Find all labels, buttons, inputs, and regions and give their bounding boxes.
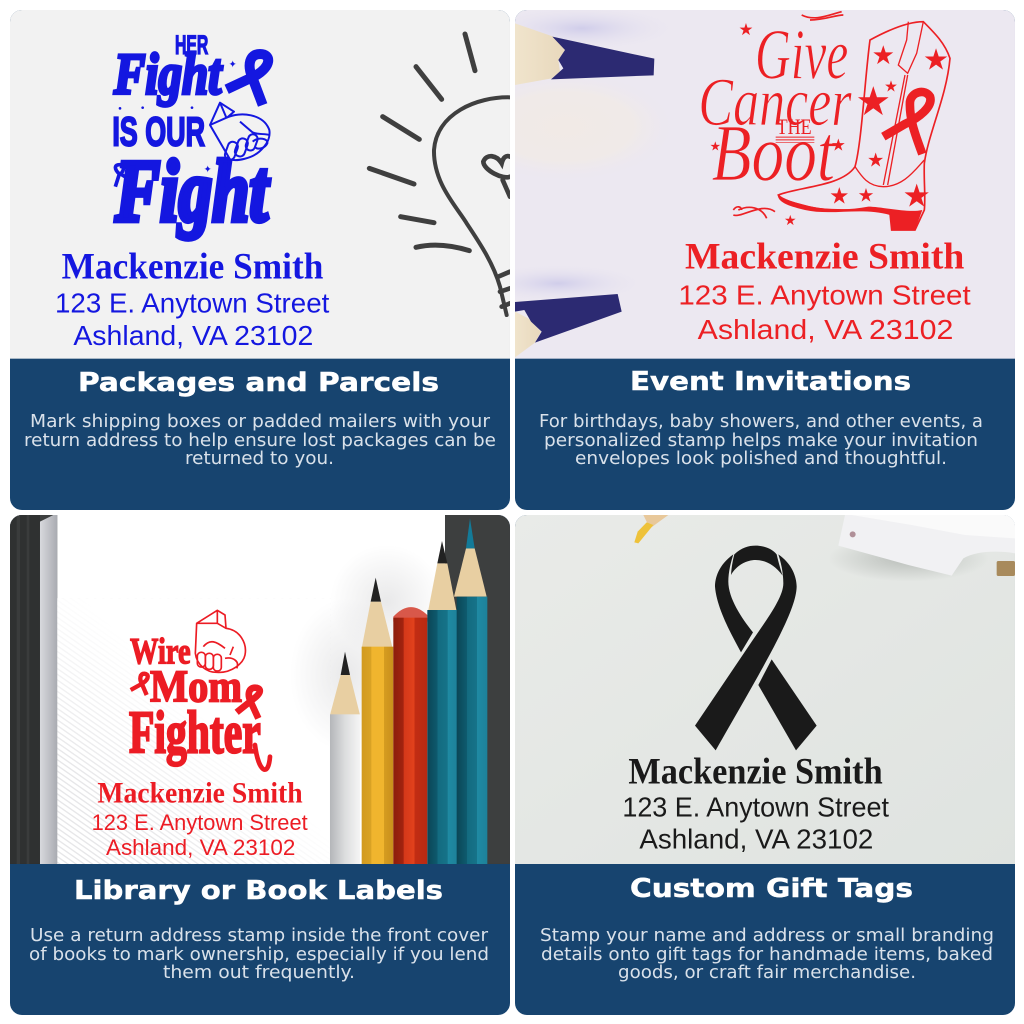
stamp artwork: Her Fight Is Our Fight: HER — [175, 30, 208, 60]
icon: pencil tip bottom — [515, 294, 622, 357]
description: Custom Gift Tags: goods, or craft fair merchandise. — [618, 963, 916, 983]
description: Library or Book Labels: Use a return address stamp inside the front cover — [30, 926, 489, 946]
pencil: yellow — [362, 578, 393, 864]
icon: pencil tip — [634, 515, 668, 543]
pencil: teal one — [427, 541, 458, 864]
description: Library or Book Labels: them out frequently. — [163, 963, 355, 983]
description: Custom Gift Tags: details onto gift tags for handmade items, baked — [541, 945, 993, 965]
stamp address line 2: Ashland, VA 23102 — [639, 823, 873, 854]
stamp name: Mackenzie Smith — [62, 247, 324, 288]
stamp artwork: Give Cancer the Boot: ★ — [784, 213, 797, 229]
book spine — [40, 515, 57, 864]
description: Event Invitations: For birthdays, baby showers, and other events, a — [539, 412, 983, 432]
pencil: silver — [330, 652, 360, 864]
pencils — [330, 518, 487, 864]
book page — [57, 515, 445, 864]
panel: Event Invitations — [515, 10, 1015, 510]
stamp address line 1: 123 E. Anytown Street — [622, 792, 889, 823]
stamp artwork: Give Cancer the Boot: ★ — [923, 42, 949, 76]
stamp artwork: Her Fight Is Our Fight: ✦ — [203, 165, 212, 176]
icon: pencil tip top — [515, 23, 654, 85]
stamp artwork: Give Cancer the Boot: Boot — [712, 110, 836, 198]
swashes — [733, 12, 843, 218]
icon: light bulb sketch — [369, 34, 510, 315]
heading: Library or Book Labels: Library or Book Labels — [74, 876, 443, 906]
stamp artwork: Give Cancer the Boot: ★ — [902, 179, 931, 215]
description: Packages and Parcels: return address to help ensure lost packages can be — [24, 431, 496, 451]
description: Packages and Parcels — [24, 412, 496, 469]
stamp artwork: Give Cancer the Boot: ★ — [884, 78, 898, 96]
stamp artwork: Give Cancer the Boot: ★ — [855, 79, 891, 125]
stamp artwork: Her Fight Is Our Fight: IS OUR — [112, 108, 205, 154]
photo: red stamp on paper with blue pencils — [515, 10, 1015, 359]
heading: Custom Gift Tags: Custom Gift Tags — [630, 874, 913, 904]
stamp name: Mackenzie Smith — [685, 236, 965, 277]
icon: awareness ribbon — [695, 546, 817, 750]
stamp artwork: Her Fight Is Our Fight: Fight — [113, 41, 223, 106]
stamp artwork: Her Fight Is Our Fight: ✦ — [228, 59, 237, 70]
stamp artwork: Give Cancer the Boot — [698, 12, 950, 230]
stamp artwork: Give Cancer the Boot: THE — [777, 114, 812, 139]
stamp address line 1: 123 E. Anytown Street — [678, 279, 971, 310]
description: Event Invitations — [539, 412, 983, 469]
icon: fist outline — [195, 610, 245, 672]
panel: Library or Book Labels — [10, 515, 510, 1015]
stamp artwork: Give Cancer the Boot: ★ — [829, 183, 849, 209]
description: Event Invitations: personalized stamp helps make your invitation — [544, 431, 978, 451]
photo: blue stamp on paper with light bulb sketch — [10, 10, 510, 359]
stamp artwork: Wire Mom Fighter: Fighter — [129, 699, 261, 765]
stamp artwork: Give Cancer the Boot: ★ — [739, 20, 753, 39]
description: Custom Gift Tags — [540, 926, 994, 983]
stamp artwork: Give Cancer the Boot: ★ — [872, 41, 895, 71]
icon: small ribbon — [114, 162, 126, 188]
description: Custom Gift Tags: Stamp your name and address or small branding — [540, 926, 994, 946]
heading: Packages and Parcels: Packages and Parcels — [78, 368, 439, 398]
description: Event Invitations: envelopes look polished and thoughtful. — [575, 449, 947, 469]
stamp artwork: Give Cancer the Boot: ★ — [867, 149, 884, 172]
pencil: red — [393, 607, 427, 864]
stamp artwork: Wire Mom Fighter — [129, 610, 270, 770]
stamp address line 2: Ashland, VA 23102 — [106, 835, 295, 860]
icon: cowboy boot — [778, 22, 950, 230]
stamp artwork: Give Cancer the Boot: Give — [755, 14, 848, 94]
photo: black stamp on paper with glue gun — [515, 515, 1015, 864]
stamp address line 2: Ashland, VA 23102 — [73, 320, 313, 351]
icon: ribbon left — [131, 674, 148, 695]
stamp name: Mackenzie Smith — [97, 776, 303, 809]
stamp address line 1: 123 E. Anytown Street — [92, 810, 308, 835]
description: Library or Book Labels — [29, 926, 489, 983]
panel: Custom Gift Tags — [515, 515, 1015, 1015]
icon: ribbon right — [237, 688, 260, 718]
stamp artwork: Her Fight Is Our Fight — [112, 30, 270, 241]
icon: awareness ribbon — [227, 54, 268, 105]
description: Packages and Parcels: returned to you. — [185, 449, 334, 469]
heading: Event Invitations: Event Invitations — [630, 367, 911, 397]
panel: Packages and Parcels — [10, 10, 510, 510]
stamp artwork: Give Cancer the Boot: ★ — [710, 139, 721, 154]
stamp artwork: Wire Mom Fighter: Wire — [130, 631, 191, 672]
stamp address line 2: Ashland, VA 23102 — [698, 314, 953, 345]
description: Library or Book Labels: of books to mark ownership, especially if you lend — [29, 945, 489, 965]
stamp artwork: Her Fight Is Our Fight: Fight — [115, 143, 270, 241]
description: Packages and Parcels: Mark shipping boxes or padded mailers with your — [30, 412, 491, 432]
icon: fist — [210, 103, 270, 161]
pencil: teal two — [454, 518, 487, 864]
stamp artwork: Give Cancer the Boot: ★ — [831, 136, 846, 155]
stamp address line 1: 123 E. Anytown Street — [55, 288, 330, 319]
stamp artwork: Give Cancer the Boot: Cancer — [698, 64, 852, 140]
photo: book page with red stamp and pencils — [10, 515, 510, 864]
stamp name: Mackenzie Smith — [628, 752, 883, 793]
stamp artwork: Wire Mom Fighter: Mom — [150, 662, 242, 712]
icon: glue gun — [828, 515, 1015, 582]
stamp artwork: Give Cancer the Boot: ★ — [858, 186, 874, 207]
